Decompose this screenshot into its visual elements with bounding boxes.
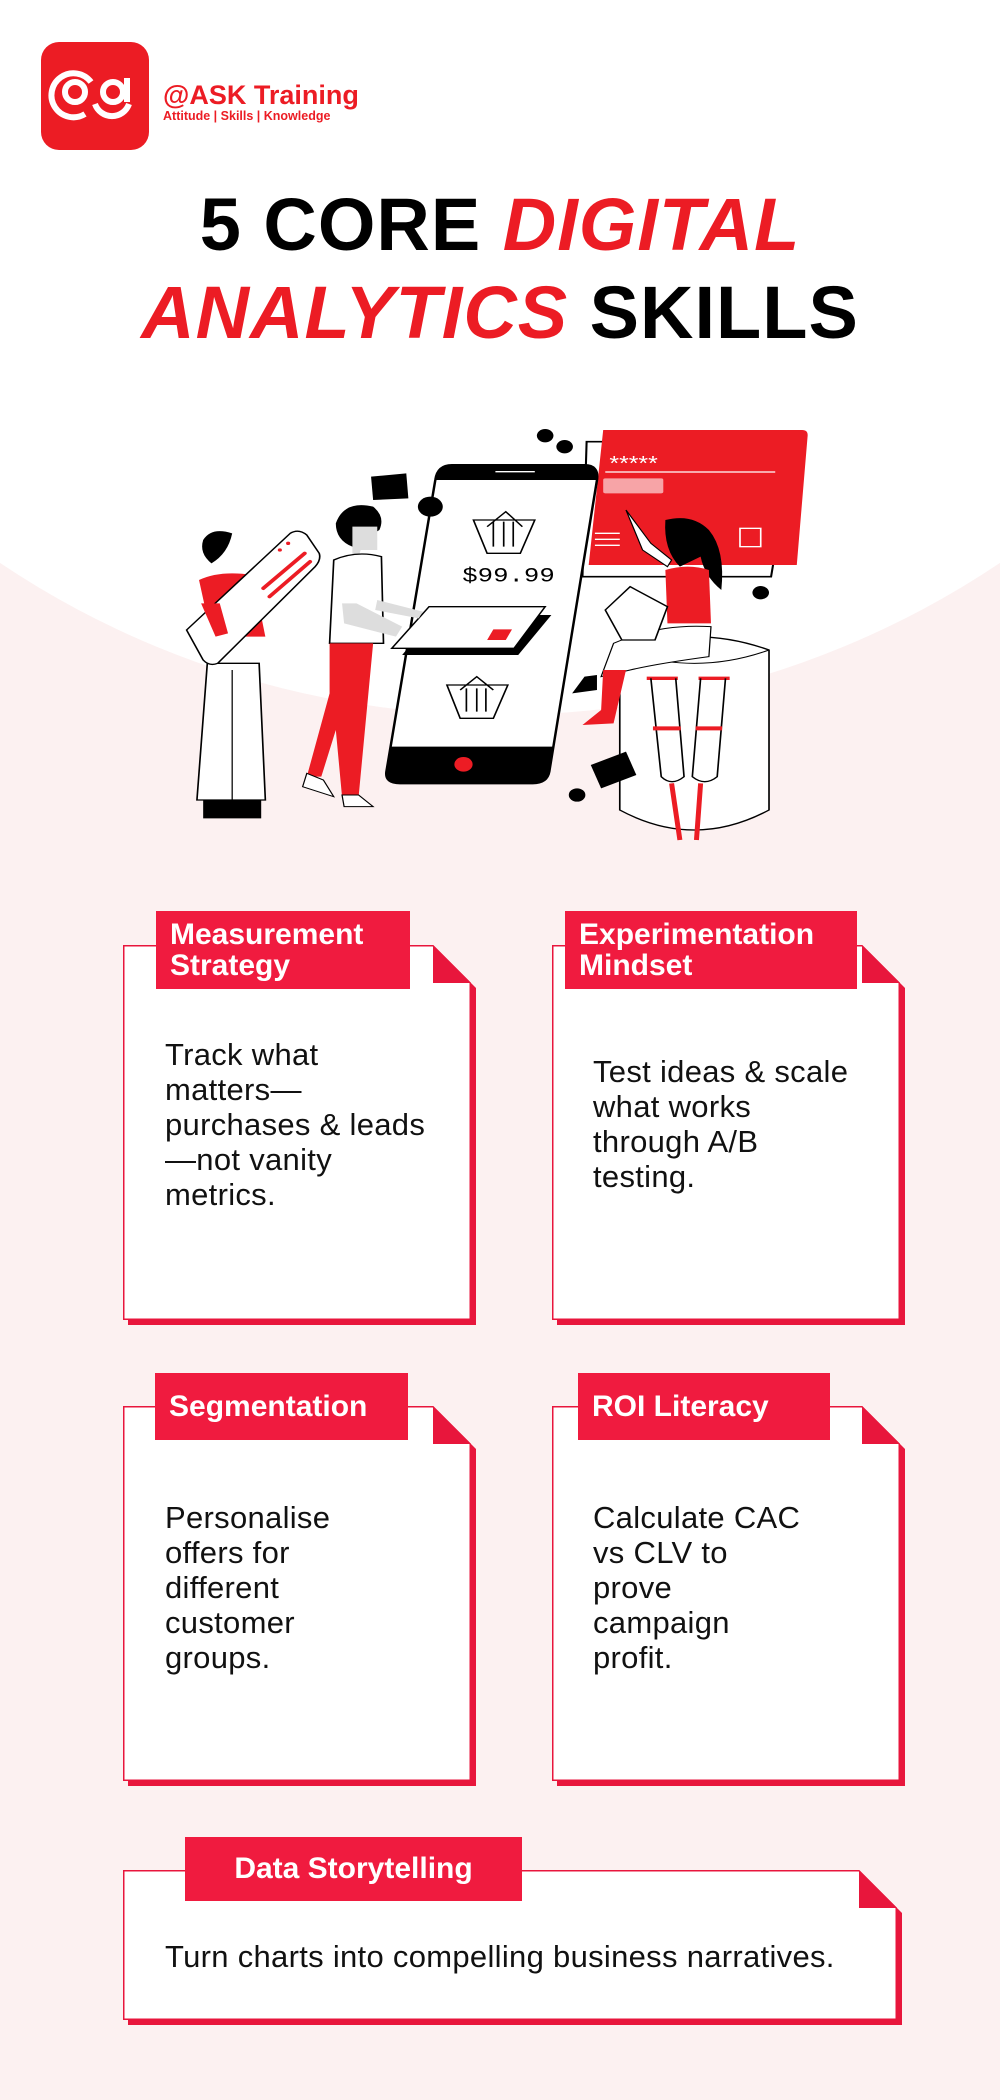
illustration: online shopping [186,429,808,840]
label [185,1837,522,1901]
person left holding card [187,531,320,818]
coins and bills [371,429,769,802]
label [578,1373,830,1440]
body text: metrics. [165,1177,276,1212]
body text: purchases & leads [165,1107,425,1142]
body text: —not vanity [165,1142,332,1177]
panel: Data Storytelling [123,1837,902,2025]
brand name: @ASK Training [163,80,359,110]
person middle [303,505,423,807]
body text: offers for [165,1535,290,1570]
body text: Turn charts into compelling business narratives. [165,1939,835,1974]
label [155,1373,408,1440]
body text [165,1037,425,1212]
body text: Test ideas & scale [593,1054,848,1089]
body text: Personalise [165,1500,330,1535]
background white arc [0,0,1000,715]
panel: Experimentation Mindset [552,911,905,1325]
body text: customer [165,1605,295,1640]
title [140,183,859,354]
body text: matters— [165,1072,302,1107]
label: Mindset [579,949,692,982]
red card screen [582,430,808,577]
phone [386,465,597,783]
body text: prove [593,1570,672,1605]
body text: testing. [593,1159,695,1194]
body text: profit. [593,1640,673,1675]
body text [165,1500,330,1675]
panel: Segmentation [123,1373,476,1786]
body text: groups. [165,1640,270,1675]
label [156,911,410,989]
phone: $99.99 [462,566,555,589]
person right sitting on cylinder [572,510,769,840]
body text: campaign [593,1605,730,1640]
body text: what works [593,1089,751,1124]
title: 5 CORE DIGITAL [200,183,800,266]
body text [593,1054,848,1194]
label: Segmentation [169,1390,367,1423]
label: Data Storytelling [234,1852,473,1885]
body text: vs CLV to [593,1535,728,1570]
body text: through A/B [593,1124,758,1159]
body text: Calculate CAC [593,1500,800,1535]
label: Experimentation [579,918,814,951]
credit card [392,607,551,655]
label: Strategy [170,949,290,982]
red card screen: ***** [609,452,658,474]
label: Measurement [170,918,363,951]
body text: different [165,1570,279,1605]
icon: logo mark [41,42,149,150]
tagline: Attitude | Skills | Knowledge [163,109,330,123]
label [565,911,857,989]
title: ANALYTICS SKILLS [141,271,859,354]
panel: Measurement Strategy [123,911,476,1325]
label: ROI Literacy [592,1390,769,1423]
logo [41,42,359,150]
body text: Track what [165,1037,318,1072]
body text [593,1500,800,1675]
panel: ROI Literacy [552,1373,905,1786]
